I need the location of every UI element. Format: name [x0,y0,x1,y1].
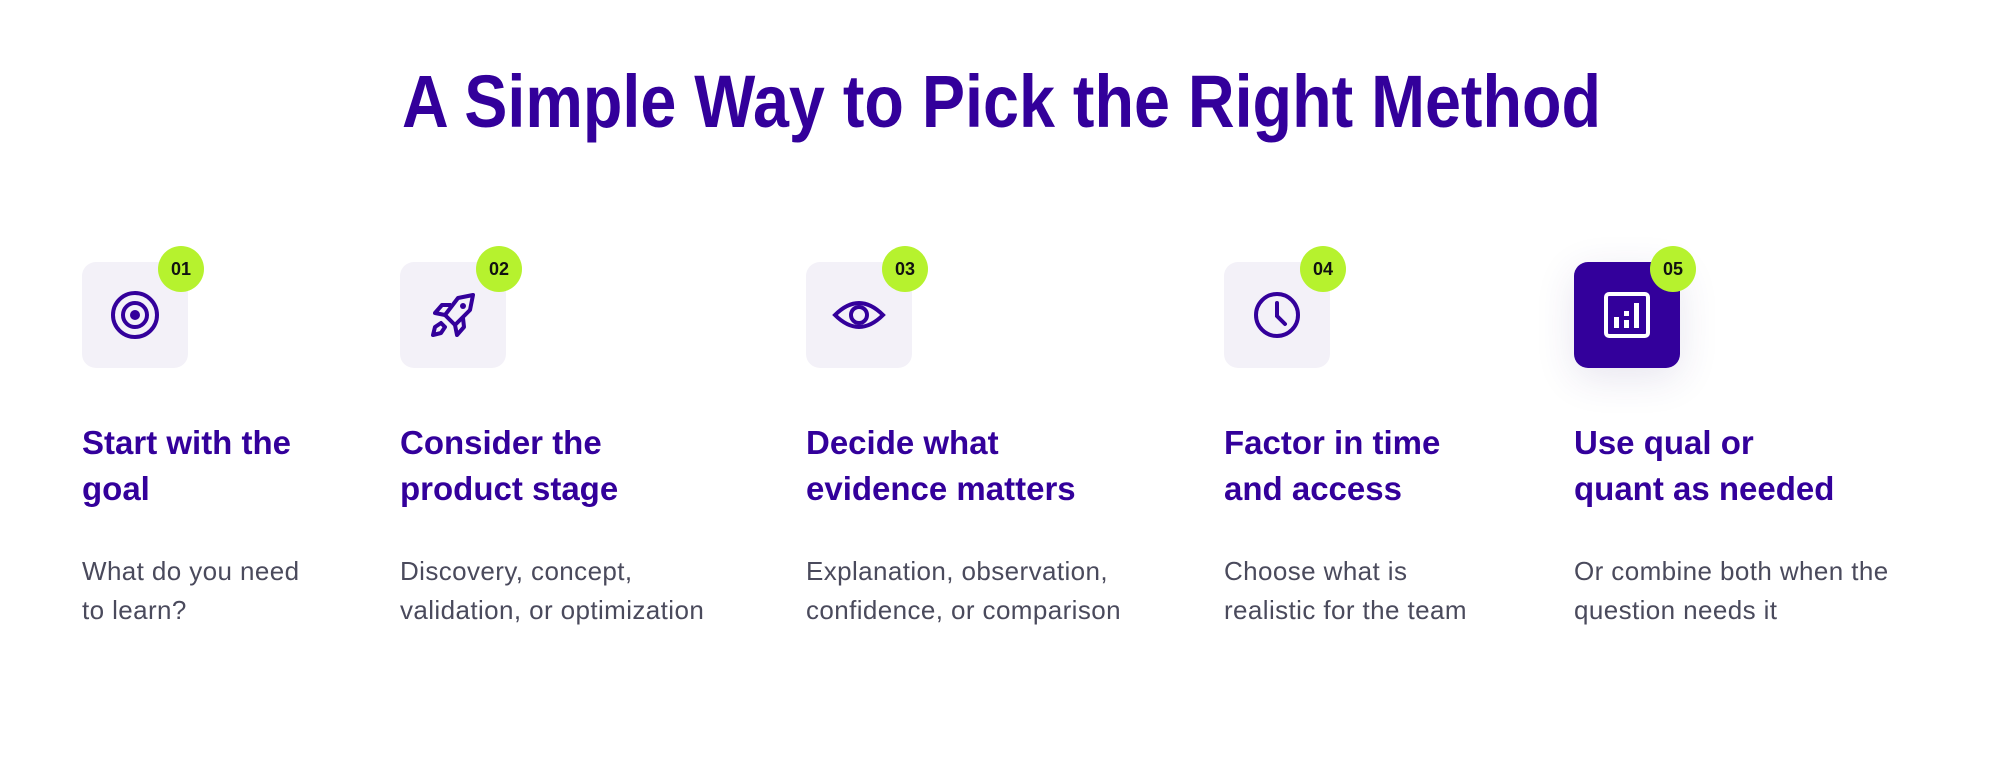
description [1574,556,1889,625]
description: realistic for the team [1224,595,1467,625]
description: Explanation, observation, [806,556,1108,586]
panel: step 3 [806,246,1121,625]
description: validation, or optimization [400,595,704,625]
description: to learn? [82,595,187,625]
panel: step 5 [1564,246,1889,625]
heading [806,424,1076,507]
icon: rocket [400,262,506,368]
description: question needs it [1574,595,1777,625]
heading: Consider the [400,424,602,461]
heading: evidence matters [806,470,1076,507]
heading [1224,424,1440,507]
icon: chart [1574,262,1680,368]
heading: Use qual or [1574,424,1754,461]
description [400,556,704,625]
icon: target [82,262,188,368]
badge 05: 05 [1663,259,1683,279]
panel: step 4 [1224,246,1467,625]
icon: clock [1224,262,1330,368]
heading [400,424,618,507]
description: confidence, or comparison [806,595,1121,625]
description [82,556,299,625]
panel: step 1 [82,246,299,625]
description: Or combine both when the [1574,556,1889,586]
heading: and access [1224,470,1402,507]
heading [1574,424,1834,507]
heading: goal [82,470,150,507]
heading [82,424,291,507]
panel: step 2 [400,246,704,625]
heading: Decide what [806,424,999,461]
badge 04: 04 [1313,259,1333,279]
heading: product stage [400,470,618,507]
icon: eye [806,262,912,368]
badge 01 [158,246,204,292]
badge 05 [1650,246,1696,292]
description: What do you need [82,556,299,586]
badge 03: 03 [895,259,915,279]
title: A Simple Way to Pick the Right Method [402,60,1601,143]
badge 02: 02 [489,259,509,279]
badge 02 [476,246,522,292]
badge 03 [882,246,928,292]
heading: quant as needed [1574,470,1834,507]
description [806,556,1121,625]
heading: Start with the [82,424,291,461]
badge 04 [1300,246,1346,292]
description: Choose what is [1224,556,1407,586]
description [1224,556,1467,625]
heading: Factor in time [1224,424,1440,461]
description: Discovery, concept, [400,556,633,586]
badge 01: 01 [171,259,191,279]
